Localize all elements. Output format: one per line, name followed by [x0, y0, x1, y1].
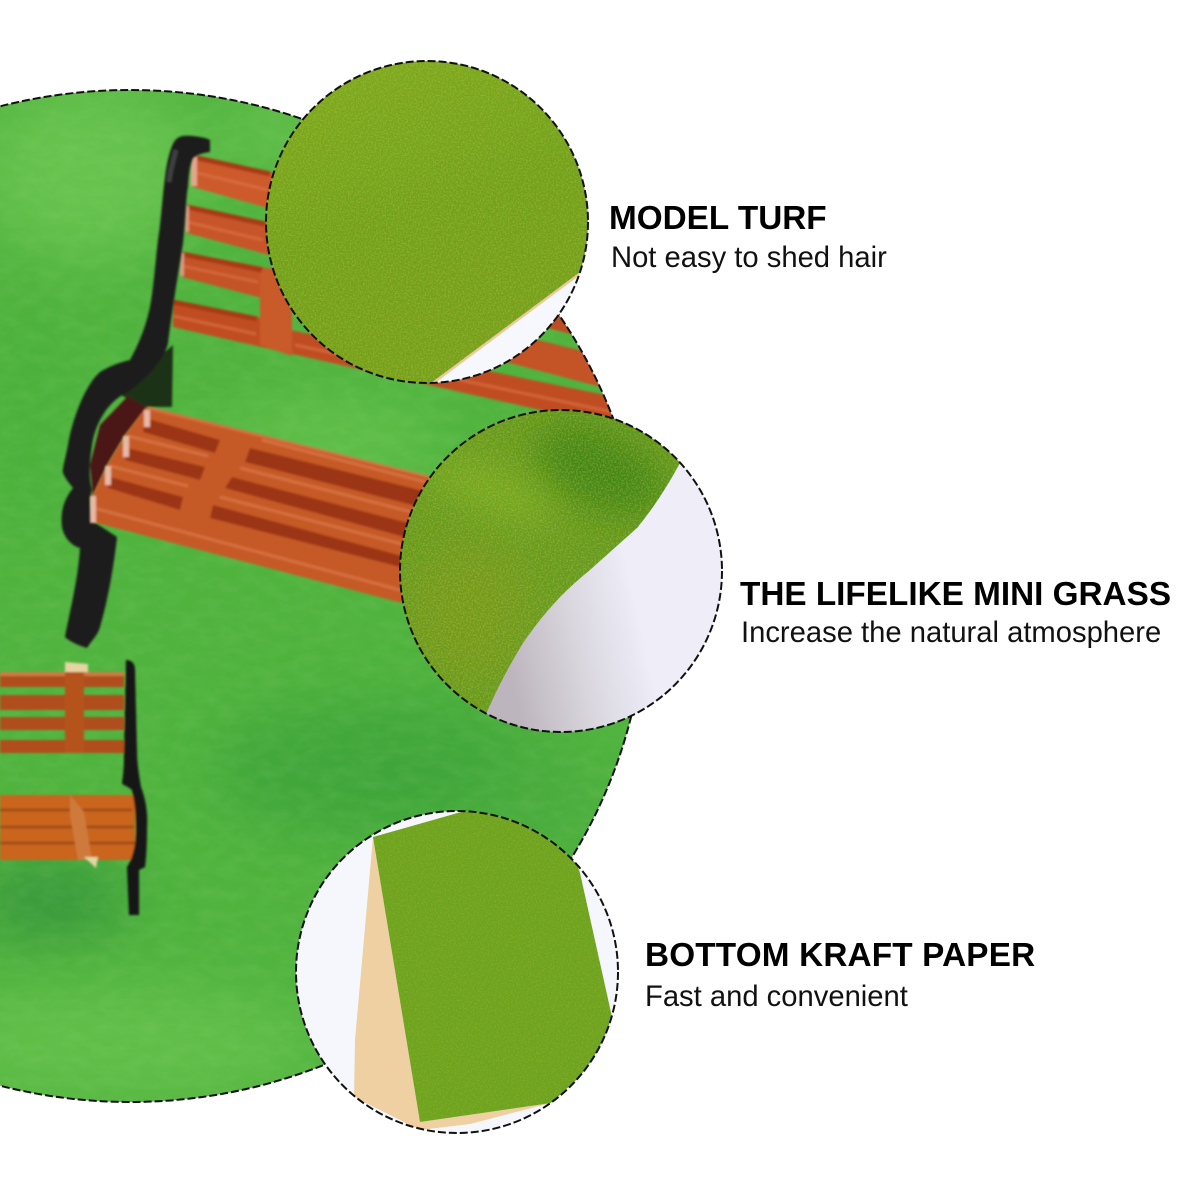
bench: back bench — [173, 155, 640, 428]
bench: frame — [62, 136, 210, 648]
description: Increase the natural atmosphere — [741, 617, 1161, 649]
description: Fast and convenient — [645, 981, 908, 1013]
callout: kraft paper — [645, 937, 1035, 1013]
lawn background circle — [0, 89, 632, 1103]
bench: front bench — [92, 407, 430, 603]
description: Not easy to shed hair — [611, 242, 887, 274]
heading: THE LIFELIKE MINI GRASS — [740, 576, 1171, 613]
heading: MODEL TURF — [609, 200, 827, 237]
bench: lower benches — [0, 660, 147, 915]
detail circle: lifelike grass — [399, 409, 723, 733]
callout: lifelike grass — [740, 576, 1171, 649]
detail circle: kraft paper — [296, 805, 625, 1133]
callout: model turf — [609, 200, 887, 274]
heading: BOTTOM KRAFT PAPER — [645, 937, 1035, 974]
product illustration — [0, 60, 723, 1134]
detail circle: model turf — [260, 55, 600, 395]
